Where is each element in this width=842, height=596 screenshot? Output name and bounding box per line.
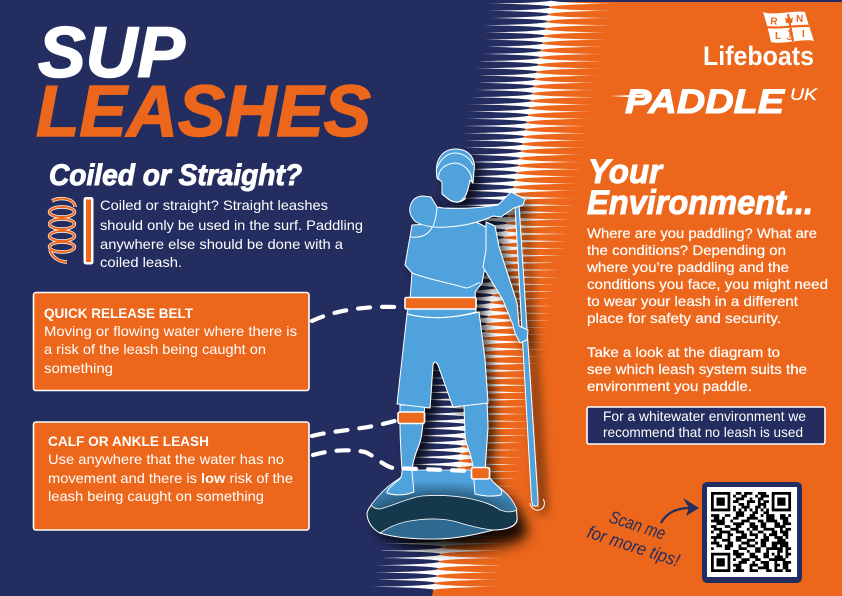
text: scan me: for more tips! <box>585 522 682 570</box>
orange calf strap <box>398 412 424 424</box>
panel: quick release belt: something <box>44 360 113 376</box>
logo: Paddle UK: PADDLE <box>625 83 786 121</box>
title: SUP LEASHES <box>36 14 371 152</box>
logo: Paddle UK <box>610 83 818 121</box>
icon: coiled and straight leash <box>50 197 94 264</box>
callout: whitewater: For a whitewater environment we <box>603 408 806 424</box>
text: coiled or straight explanation: coiled leash. <box>100 254 182 270</box>
logo: RNLI flag: R <box>770 16 779 28</box>
panel: calf or ankle leash: movement and there is low risk of the <box>48 470 293 486</box>
text: scan me: Scan me <box>607 507 668 544</box>
left leg <box>387 405 425 495</box>
board: lower panel <box>380 519 493 539</box>
paddle shaft <box>515 205 538 506</box>
text: environment paragraph one: where you’re paddling and the <box>586 259 789 275</box>
raised arm across chest <box>410 192 525 227</box>
arrow: to QR code <box>661 498 699 523</box>
turban lines <box>437 153 473 182</box>
logo: Lifeboats: Lifeboats <box>703 41 814 71</box>
text: scan me <box>585 507 682 570</box>
heading: Your Environment: Environment... <box>587 184 813 222</box>
text: coiled or straight explanation <box>100 197 363 270</box>
chest detail <box>410 226 480 288</box>
panel: quick release belt: QUICK RELEASE BELT <box>44 305 193 321</box>
callout: whitewater: recommend that no leash is used <box>603 424 803 440</box>
callout: whitewater <box>587 407 825 444</box>
QR code <box>702 482 802 583</box>
panel: quick release belt: Moving or flowing water where there is <box>44 323 297 339</box>
leader line: ankle <box>313 450 471 471</box>
heading: Your Environment <box>587 153 813 222</box>
text: coiled or straight explanation: anywhere else should be done with a <box>100 236 343 252</box>
panel: quick release belt <box>34 292 309 390</box>
panel: quick release belt: a risk of the leash being caught on <box>44 341 266 357</box>
text: environment paragraph two: Take a look at the diagram to <box>587 344 780 360</box>
text: environment paragraph one: the conditions? Depending on <box>587 242 786 258</box>
waist line <box>407 312 479 318</box>
logo: RNLI flag: L <box>775 31 781 42</box>
arm holding shaft <box>483 222 528 343</box>
text: environment paragraph two: see which leash system suits the <box>587 361 807 377</box>
text: environment paragraph two <box>587 344 807 394</box>
panel: calf or ankle leash: Use anywhere that the water has no <box>48 451 284 467</box>
leader line: calf <box>312 420 398 436</box>
text: coiled or straight explanation: should only be used in the surf. Paddling <box>100 217 363 233</box>
logo: Paddle UK: UK <box>790 85 818 104</box>
shoulder strap detail <box>433 194 466 226</box>
torso <box>405 222 488 318</box>
text: environment paragraph one: Where are you paddling? What are <box>587 225 817 241</box>
paddle tip ring <box>530 499 544 510</box>
panel: calf or ankle leash <box>34 422 309 530</box>
heading: Your Environment: Your <box>588 153 664 191</box>
right leg <box>464 402 502 496</box>
heading: Coiled or Straight?: Coiled or Straight? <box>49 159 302 192</box>
leader line: belt <box>312 307 397 321</box>
figure: paddler on board with paddle <box>367 149 538 539</box>
white speed streaks <box>371 1 614 590</box>
logo: RNLI flag <box>763 12 814 43</box>
orange waist belt <box>405 298 476 309</box>
logo: RNLI flag: I <box>802 29 805 40</box>
text: environment paragraph one: to wear your leash in a different <box>587 293 798 309</box>
head and turban <box>436 149 474 202</box>
board: deck <box>371 470 517 512</box>
board shadow <box>396 514 528 550</box>
board: hull <box>367 490 517 539</box>
text: coiled or straight explanation: Coiled or straight? Straight leashes <box>100 197 328 213</box>
text: environment paragraph one: conditions you face, you might need <box>587 276 828 292</box>
text: environment paragraph one <box>586 225 828 326</box>
text: environment paragraph two: environment you paddle. <box>587 378 752 394</box>
text: environment paragraph one: place for safety and security. <box>587 310 781 326</box>
title: SUP LEASHES: LEASHES <box>36 72 371 152</box>
shorts <box>397 312 488 408</box>
panel: calf or ankle leash: CALF OR ANKLE LEASH <box>48 433 209 449</box>
orange ankle strap <box>472 468 490 479</box>
title: SUP LEASHES: SUP <box>38 14 186 93</box>
logo: RNLI flag: N <box>796 14 803 25</box>
panel: calf or ankle leash: leash being caught on something <box>48 488 264 504</box>
